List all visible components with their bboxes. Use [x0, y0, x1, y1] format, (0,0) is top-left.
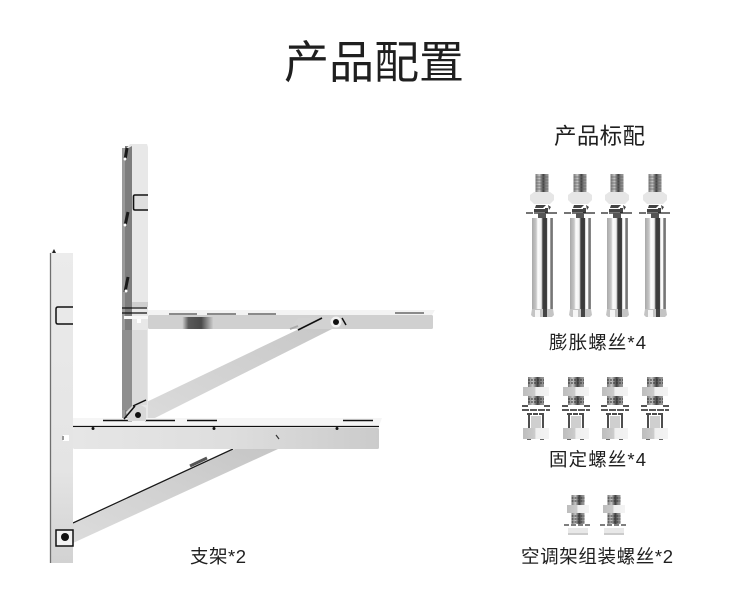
- front bracket arm: [73, 418, 382, 449]
- back bracket arm: [148, 310, 435, 330]
- front bracket brace: [73, 449, 278, 543]
- caption: fixing bolts: 固定螺丝*4: [549, 449, 646, 470]
- bracket illustration: back bracket: [122, 144, 435, 423]
- caption: expansion bolts: 膨胀螺丝*4: [549, 332, 646, 353]
- heading: standard accessories: 产品标配: [554, 124, 645, 149]
- icon: four fixing bolts: [522, 377, 669, 440]
- front bracket upright: [50, 249, 73, 563]
- caption: bracket assembly bolts: 空调架组装螺丝*2: [521, 546, 673, 567]
- back bracket brace: [134, 318, 345, 423]
- title: 产品配置: [284, 37, 464, 88]
- back bracket foot pivot: [124, 400, 146, 421]
- caption: bracket: 支架*2: [190, 546, 246, 567]
- back bracket upright: [122, 144, 148, 420]
- bracket illustration: front bracket: [50, 249, 382, 563]
- icon: two bracket assembly bolts: [564, 495, 628, 534]
- icon: four expansion bolts: [526, 174, 670, 317]
